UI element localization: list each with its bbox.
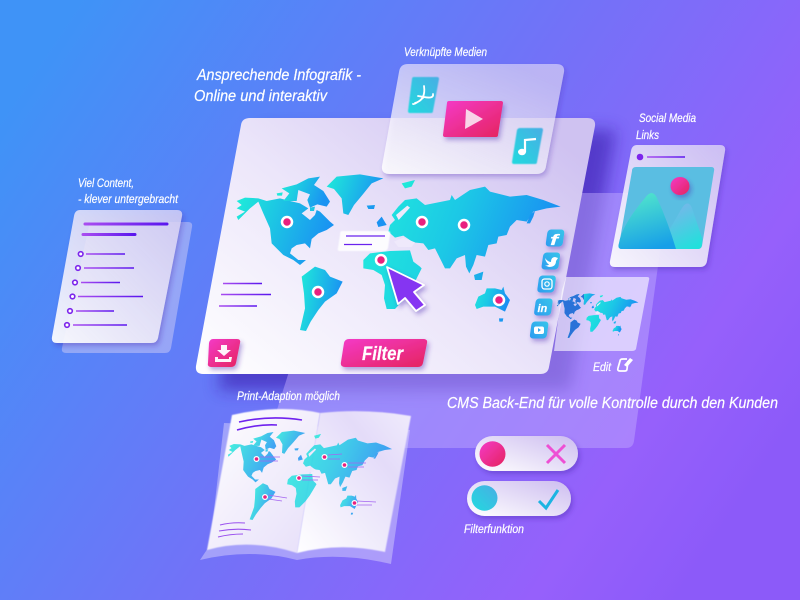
list card front sheet (52, 210, 182, 343)
image mountain back (668, 204, 702, 249)
icon: youtube (529, 322, 549, 338)
list card back sheet (62, 222, 192, 353)
title line 2: Online und interaktiv (194, 88, 328, 105)
book right page (297, 411, 411, 553)
label: Verknuepfte Medien: Verknüpfte Medien (404, 45, 487, 59)
social image (619, 167, 714, 249)
icon: cross (547, 445, 565, 463)
thumbnail map (552, 293, 640, 338)
panel: list card (52, 210, 192, 353)
book cover (200, 423, 410, 564)
post line (647, 156, 685, 158)
heading bar second (259, 151, 336, 156)
button: filter: Filter (362, 344, 404, 365)
list lines (73, 254, 143, 325)
icon: cursor arrow (387, 267, 425, 311)
left text lines (219, 284, 271, 306)
panel: CMS back-end (265, 193, 668, 448)
book pin lines (260, 454, 376, 505)
icon: music tile (512, 128, 543, 164)
avatar dot (637, 154, 643, 160)
panel: social media card (610, 145, 725, 267)
image sun (670, 177, 690, 195)
icon: video play (443, 101, 503, 137)
icon: twitter (541, 252, 561, 270)
icon: check (539, 490, 558, 508)
media card (382, 64, 564, 174)
toggle: off (475, 436, 578, 471)
panel: main map screen (196, 118, 595, 374)
toggle: on (467, 481, 571, 516)
image mountain front (618, 193, 676, 249)
thumbnail map dark overlay (556, 294, 584, 338)
icon: pdf tile (408, 77, 439, 113)
list heading bars (83, 224, 167, 235)
main panel shadow (218, 130, 616, 390)
book pins (254, 455, 357, 505)
label: Edit: Edit (593, 360, 612, 374)
label: klever untergebracht: - klever untergebracht (78, 192, 179, 206)
world map (237, 174, 561, 331)
book heading lines (237, 418, 302, 430)
button: download (208, 339, 240, 367)
label: Print-Adaption: Print-Adaption möglich (237, 389, 340, 403)
icon: linkedin: in (538, 303, 548, 315)
map tooltip (338, 231, 390, 251)
list bullets (65, 252, 83, 327)
icon: facebook: f (550, 232, 561, 249)
book (200, 409, 411, 564)
book left page (207, 409, 320, 553)
book map (218, 431, 395, 520)
button: filter (341, 339, 427, 367)
label: Viel Content: Viel Content, (78, 176, 134, 190)
heading bar top (262, 136, 416, 140)
social icons (529, 230, 565, 338)
panel: edit thumbnail (552, 277, 649, 351)
map pins (282, 217, 504, 305)
title line 1: Ansprechende Infografik - (196, 67, 361, 84)
icon: edit (618, 358, 633, 371)
book left text lines (218, 523, 251, 537)
label: Filterfunktion: Filterfunktion (464, 524, 524, 536)
label: Social Media: Social Media (639, 111, 696, 125)
label: CMS back-end: CMS Back-End für volle Kontrolle durch den Kunden (447, 395, 778, 412)
panel: linked media (382, 64, 564, 174)
icon: instagram (537, 276, 556, 292)
icon: download (215, 345, 232, 362)
label: Links: Links (636, 128, 659, 142)
